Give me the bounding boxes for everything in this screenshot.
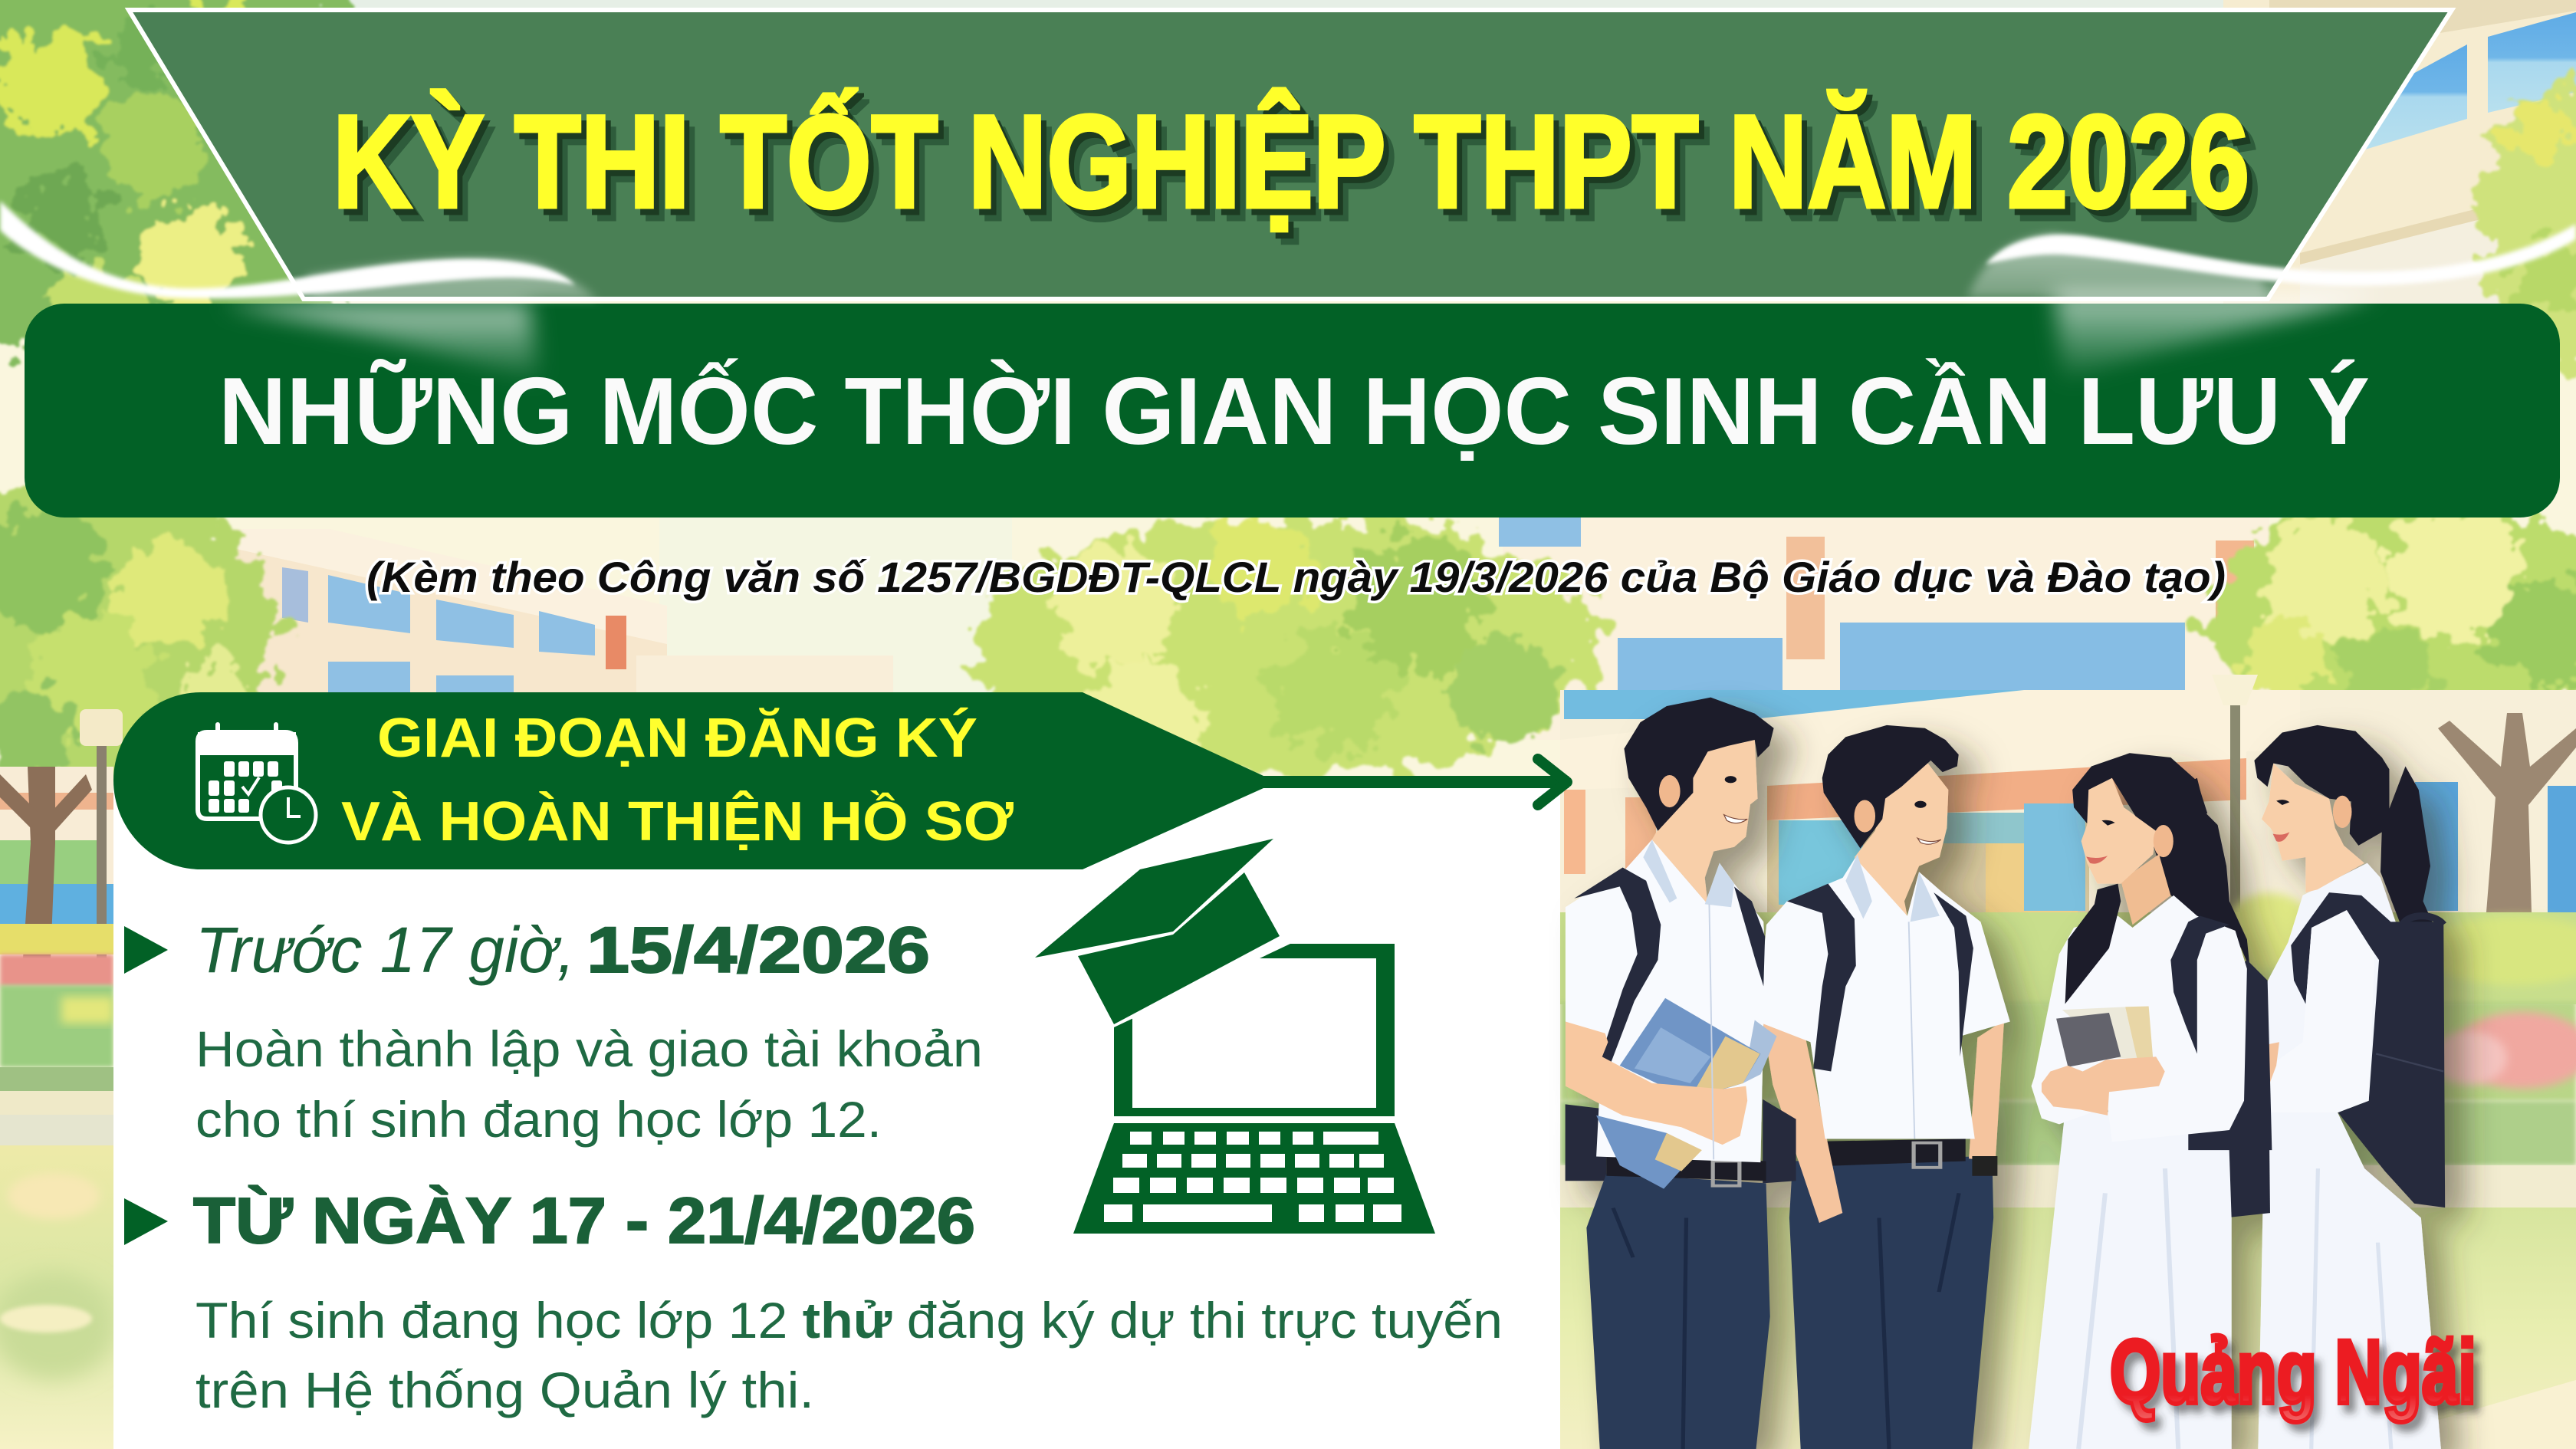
left strip: trees, lamp, flowers and bushes [0, 709, 123, 1449]
building: upper right [2223, 0, 2576, 307]
item 2: description: trên Hệ thống Quản lý thi. [196, 1362, 814, 1418]
arrow line and head [1257, 759, 1569, 805]
building: centre left [226, 529, 893, 694]
section header text: VÀ HOÀN THIỆN HỒ SƠ [341, 790, 1014, 853]
trees: top left foliage [0, 0, 337, 353]
student 1: boy with book [1566, 698, 1796, 1449]
swoosh: right white ribbon [1967, 224, 2576, 297]
title banner [129, 10, 2452, 299]
sky [307, 0, 2269, 15]
trees: right crown [2208, 498, 2576, 728]
trees: left of note [0, 475, 276, 782]
student 2: boy with hand in pocket [1758, 725, 2010, 1449]
section header arrow shape [113, 692, 1263, 869]
subtitle text: NHỮNG MỐC THỜI GIAN HỌC SINH CẦN LƯU Ý [219, 358, 2370, 465]
section header text [341, 707, 1014, 853]
source note: (Kèm theo Công văn số 1257/BGDĐT-QLCL ngày 19/3/2026 của Bộ Giáo dục và Đào tạo) [366, 553, 2226, 601]
icon: laptop with graduation cap [1035, 839, 1435, 1234]
section header text: GIAI ĐOẠN ĐĂNG KÝ [377, 707, 978, 769]
panel: registration stage [113, 692, 1569, 1449]
item 1: date line: 15/4/2026 [586, 914, 930, 986]
item 1: description: cho thí sinh đang học lớp 12. [196, 1091, 882, 1148]
subtitle bar [25, 291, 2560, 518]
item 2: description [196, 1292, 1503, 1418]
trees: centre [974, 506, 1602, 774]
item 2: description: Thí sinh đang học lớp 12 thử đăng ký dự thi trực tuyến [196, 1292, 1503, 1349]
item 1: description [196, 1020, 983, 1148]
building: centre right [1499, 518, 2269, 740]
student 3: girl with books [2029, 753, 2272, 1449]
item 1: date line: Trước 17 giờ, [196, 914, 575, 986]
item 1: description: Hoàn thành lập và giao tài khoản [196, 1020, 983, 1077]
illustration: four students [1566, 698, 2445, 1449]
item 2: date line: TỪ NGÀY 17 - 21/4/2026 [193, 1184, 975, 1257]
icon: calendar with clock [198, 722, 316, 843]
trees: upper right foliage [2476, 84, 2576, 360]
swoosh: left white ribbon [0, 201, 598, 301]
item 1: date line [124, 914, 930, 986]
right strip: school front, garden and lawn [1560, 675, 2576, 1449]
student 4: girl with ponytail and backpack [2252, 725, 2445, 1449]
building peeks at top right of centre tree [1499, 518, 1581, 544]
